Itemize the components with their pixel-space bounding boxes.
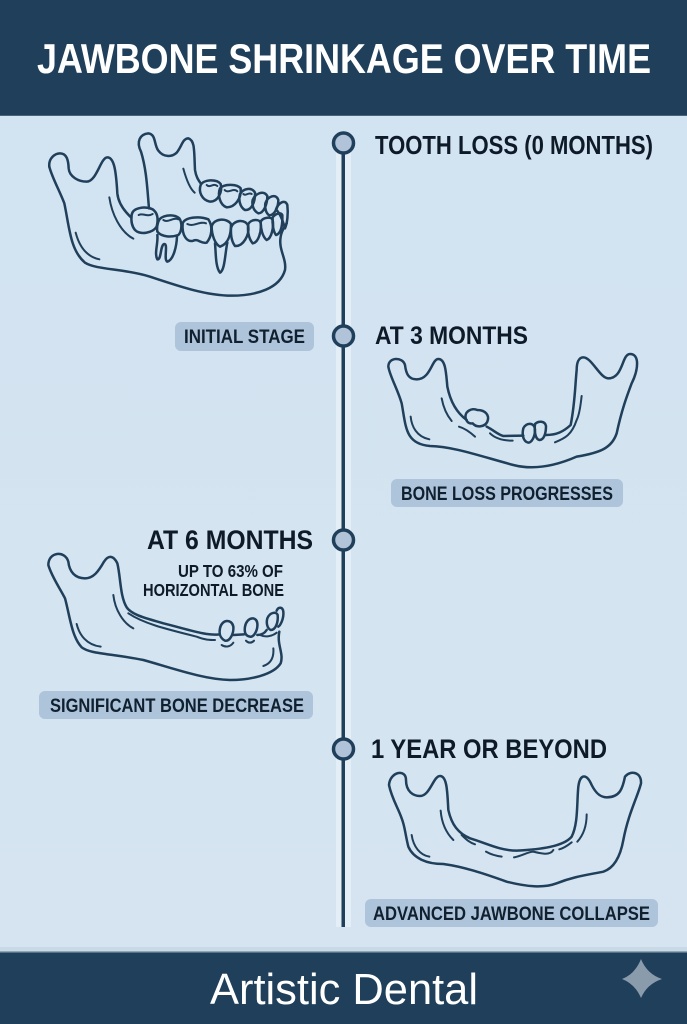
footer band: [0, 947, 687, 1024]
illustration: collapsed jaw: [389, 773, 641, 886]
header band: [0, 0, 687, 116]
timeline node: 1 year: [334, 739, 354, 759]
timeline node: 3 months: [334, 326, 354, 346]
text block: 63 percent of horizontal bone: HORIZONTAL BONE: [143, 580, 284, 600]
text block: 63 percent of horizontal bone: UP TO 63% OF: [178, 561, 283, 581]
label: significant bone decrease: SIGNIFICANT BONE DECREASE: [50, 696, 304, 717]
stage heading: at 6 months: AT 6 MONTHS: [147, 525, 313, 555]
timeline node: 6 months: [334, 530, 354, 550]
stage heading: at 3 months: AT 3 MONTHS: [375, 322, 528, 350]
timeline: [334, 133, 354, 927]
icon: four-point sparkle: [622, 959, 662, 998]
illustration: reduced jaw: [48, 554, 283, 680]
illustration: full jaw with teeth: [49, 133, 288, 296]
label: advanced jawbone collapse: [365, 899, 658, 927]
stage heading: 1 year or beyond: 1 YEAR OR BEYOND: [371, 734, 607, 764]
label: advanced jawbone collapse: ADVANCED JAWBONE COLLAPSE: [373, 904, 650, 925]
illustration: jaw with few teeth: [388, 354, 637, 467]
footer brand name: Artistic Dental: [210, 965, 478, 1014]
label: significant bone decrease: [39, 691, 313, 719]
label: initial stage: [175, 322, 314, 351]
timeline node: tooth loss: [334, 133, 354, 153]
text block: 63 percent of horizontal bone: [143, 561, 284, 600]
label: bone loss progresses: BONE LOSS PROGRESSES: [401, 484, 613, 505]
label: initial stage: INITIAL STAGE: [184, 327, 305, 348]
label: bone loss progresses: [391, 479, 623, 507]
